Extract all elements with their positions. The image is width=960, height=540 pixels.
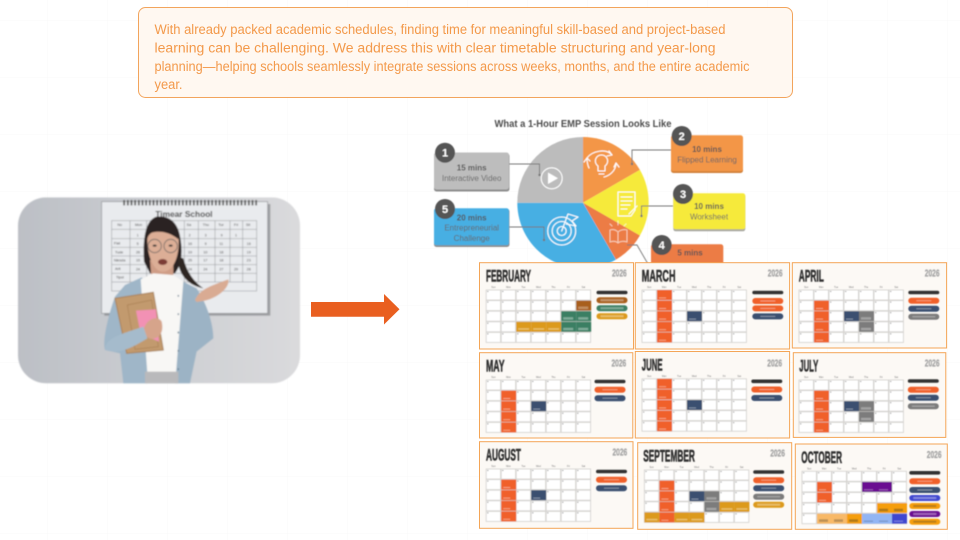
calendar grid: [802, 468, 906, 524]
label 2: flipped learning: 2: [679, 131, 685, 143]
calendar content: JULY: [799, 357, 819, 376]
photo: confused teacher in front of a timetable: 17: [203, 259, 207, 263]
legend: [752, 291, 783, 319]
callout: intro text box: [138, 8, 792, 98]
year: 2026: [612, 448, 627, 459]
panel background: [792, 263, 947, 348]
calendar: July: [793, 353, 946, 437]
photo: confused teacher in front of a timetable: 2: [189, 233, 191, 237]
scheduled sessions: [814, 391, 874, 432]
photo: confused teacher in front of a timetable: Sa: [187, 223, 192, 227]
calendar content: APRIL: [799, 267, 824, 286]
calendar grid: [799, 376, 903, 432]
photo: confused teacher in front of a timetable: 19: [247, 250, 251, 254]
photo: confused teacher in front of a timetable: 10: [203, 250, 207, 254]
year: 2026: [925, 359, 940, 370]
calendar content: [486, 357, 626, 432]
photo: confused teacher in front of a timetable: 18: [219, 250, 223, 254]
icon: worksheet: [618, 192, 637, 216]
photo: confused teacher in front of a timetable: Nlesda: [114, 259, 126, 263]
connector: flipped learning: [631, 150, 671, 165]
year: 2026: [925, 269, 940, 280]
year: 2026: [768, 269, 783, 280]
calendar grid: [486, 465, 591, 521]
photo: confused teacher in front of a timetable: 5: [137, 242, 139, 246]
scheduled sessions: [516, 301, 591, 332]
calendar content: [799, 267, 940, 342]
legend: [596, 291, 628, 319]
connector: entrepreneurial challenge: [509, 227, 545, 241]
photo: confused teacher in front of a timetable: Tipol: [116, 276, 124, 280]
label 3: worksheet: Worksheet: [690, 212, 729, 221]
calendar panels outline layer: February: [480, 263, 634, 349]
calendar content: [799, 357, 940, 432]
calendar grid: [486, 376, 591, 432]
calendar content: OCTOBER: [801, 448, 842, 467]
label 1: interactive video: 15 mins: [457, 164, 487, 173]
year: 2026: [612, 359, 626, 370]
photo: confused teacher in front of a timetable: Fiat: [114, 242, 120, 246]
photo: confused teacher in front of a timetable: 25: [188, 259, 192, 263]
label 5: entrepreneurial challenge: Entrepreneurial: [444, 224, 499, 233]
calendar content: [643, 447, 785, 522]
connector: fourth segment: [627, 245, 648, 264]
photo: confused teacher in front of a timetable: 16: [247, 242, 251, 246]
calendar: October: [795, 444, 947, 529]
calendar grid: [486, 286, 591, 342]
photo: confused teacher in front of a timetable: Sit: [246, 223, 250, 227]
connector: worksheet: [640, 206, 673, 217]
photo: confused teacher in front of a timetable: 19: [188, 250, 192, 254]
icon: play button: [541, 168, 562, 189]
photo: confused teacher in front of a timetable: 18: [219, 259, 223, 263]
label 3: worksheet: 3: [680, 189, 686, 201]
photo: confused teacher in front of a timetable: 9: [205, 242, 207, 246]
label 3: worksheet: [673, 184, 745, 231]
callout: intro text box: year.: [154, 77, 182, 92]
photo: confused teacher in front of a timetable: 24: [188, 267, 192, 271]
panel background: [635, 263, 790, 349]
callout: intro text box: planning—helping schools seamlessly integrate sessions across weeks, months, and the entire academic: [154, 59, 750, 74]
scheduled sessions: [657, 379, 702, 431]
callout: intro text box: learning can be challenging. We address this with clear timetable structuring and year-long: [154, 40, 716, 56]
panel background: [635, 352, 790, 438]
infographic: 1-hour session pie chart: [434, 119, 745, 281]
month title: MAY: [486, 357, 505, 376]
month title: MARCH: [642, 267, 675, 286]
photo: confused teacher in front of a timetable: 23: [247, 259, 251, 263]
calendar content: FEBRUARY: [486, 267, 531, 286]
scheduled sessions: [644, 481, 749, 522]
legend: [908, 291, 939, 320]
panel background: [480, 263, 634, 349]
photo: confused teacher in front of a timetable: 16: [188, 242, 192, 246]
calendar content: [486, 267, 628, 342]
label 1: interactive video: [434, 143, 510, 192]
label 4: five-minute segment: [651, 235, 723, 281]
legend: [596, 470, 627, 491]
label 4: five-minute segment: 4: [659, 240, 666, 252]
photo: confused teacher in front of a timetable: Mon: [135, 223, 142, 227]
calendar grid: [799, 286, 903, 342]
photo: confused teacher in front of a timetable: 26: [136, 250, 140, 254]
label 2: flipped learning: 10 mins: [692, 145, 722, 154]
photo: confused teacher in front of a timetable: No: [117, 223, 122, 227]
photo: confused teacher in front of a timetable: Thu: [203, 223, 209, 227]
year: 2026: [770, 449, 785, 460]
label 5: entrepreneurial challenge: [434, 199, 510, 247]
calendar: August: [480, 442, 633, 528]
photo: confused teacher in front of a timetable: 1: [137, 233, 139, 237]
connector: video: [509, 164, 541, 176]
calendar content: [642, 267, 783, 342]
calendar: May: [480, 353, 633, 438]
panel background: [638, 443, 792, 529]
calendar content: SEPTEMBER: [643, 447, 695, 466]
photo: confused teacher in front of a timetable: 28: [247, 267, 251, 271]
pie chart: [517, 137, 649, 268]
scheduled sessions: [501, 391, 546, 432]
photo: confused teacher in front of a timetable: 11: [219, 242, 223, 246]
scheduled sessions: [814, 301, 874, 342]
photo: confused teacher in front of a timetable: 3: [205, 233, 207, 237]
photo: confused teacher in front of a timetable: 27: [219, 267, 223, 271]
legend: [751, 380, 782, 401]
panel background: [795, 444, 947, 529]
photo: confused teacher in front of a timetable: Tude: [115, 250, 123, 254]
arrow: [311, 294, 400, 324]
legend: [753, 470, 784, 508]
photo: confused teacher in front of a timetable: 29: [234, 267, 238, 271]
photo: confused teacher in front of a timetable: Fri: [234, 223, 238, 227]
calendar grid: [642, 375, 746, 431]
icon: open book: [610, 221, 627, 243]
photo: confused teacher in front of a timetable: 24: [136, 267, 140, 271]
scheduled sessions: [657, 290, 702, 342]
photo: confused teacher in front of a timetable: Arit: [115, 267, 120, 271]
icon: light bulb with cycle arrows: [584, 151, 619, 177]
calendar content: JUNE: [642, 356, 662, 374]
calendar: June: [635, 352, 790, 438]
icon: target with flag: [548, 214, 578, 245]
legend: [908, 379, 939, 409]
calendar: March: [635, 263, 790, 349]
panel background: [480, 353, 633, 438]
label 5: entrepreneurial challenge: Challenge: [454, 234, 490, 243]
label 5: entrepreneurial challenge: 20 mins: [457, 213, 487, 222]
photo: confused teacher in front of a timetable: 9: [221, 233, 223, 237]
label 3: worksheet: 10 mins: [694, 202, 724, 211]
year: 2026: [767, 358, 782, 370]
callout: intro text box: With already packed academic schedules, finding time for meaningful skill-based and project-based: [154, 22, 726, 37]
photo: confused teacher in front of a timetable: Timear School: [155, 209, 213, 219]
calendar grid: [644, 466, 749, 522]
calendar content: [801, 448, 942, 525]
calendar content: AUGUST: [486, 446, 521, 465]
photo: confused teacher in front of a timetable: 24: [203, 267, 207, 271]
photo: confused teacher in front of a timetable: 15: [136, 259, 140, 263]
legend: [909, 471, 940, 525]
label 2: flipped learning: [671, 126, 743, 173]
scheduled sessions: [817, 482, 907, 524]
calendar content: [642, 356, 782, 431]
panel background: [793, 353, 946, 437]
photo: confused teacher in front of a timetable: [18, 197, 300, 385]
calendar: April: [792, 263, 947, 348]
photo: confused teacher in front of a timetable: Tur: [218, 223, 224, 227]
photo: confused teacher in front of a timetable: 1: [235, 233, 237, 237]
label 5: entrepreneurial challenge: 5: [442, 204, 448, 216]
panel background: [480, 442, 633, 528]
scheduled sessions: [501, 480, 546, 521]
calendar: September: [638, 443, 792, 529]
label 2: flipped learning: Flipped Learning: [677, 155, 737, 164]
label 1: interactive video: 1: [442, 148, 448, 160]
legend: [594, 380, 626, 401]
calendar content: [486, 446, 627, 521]
label 4: five-minute segment: 5 mins: [677, 249, 703, 258]
chart title: What a 1-Hour EMP Session Looks Like: [494, 119, 672, 130]
calendar grid: [642, 286, 746, 342]
year: 2026: [927, 450, 942, 461]
year: 2026: [612, 269, 627, 280]
label 1: interactive video: Interactive Video: [442, 174, 502, 183]
